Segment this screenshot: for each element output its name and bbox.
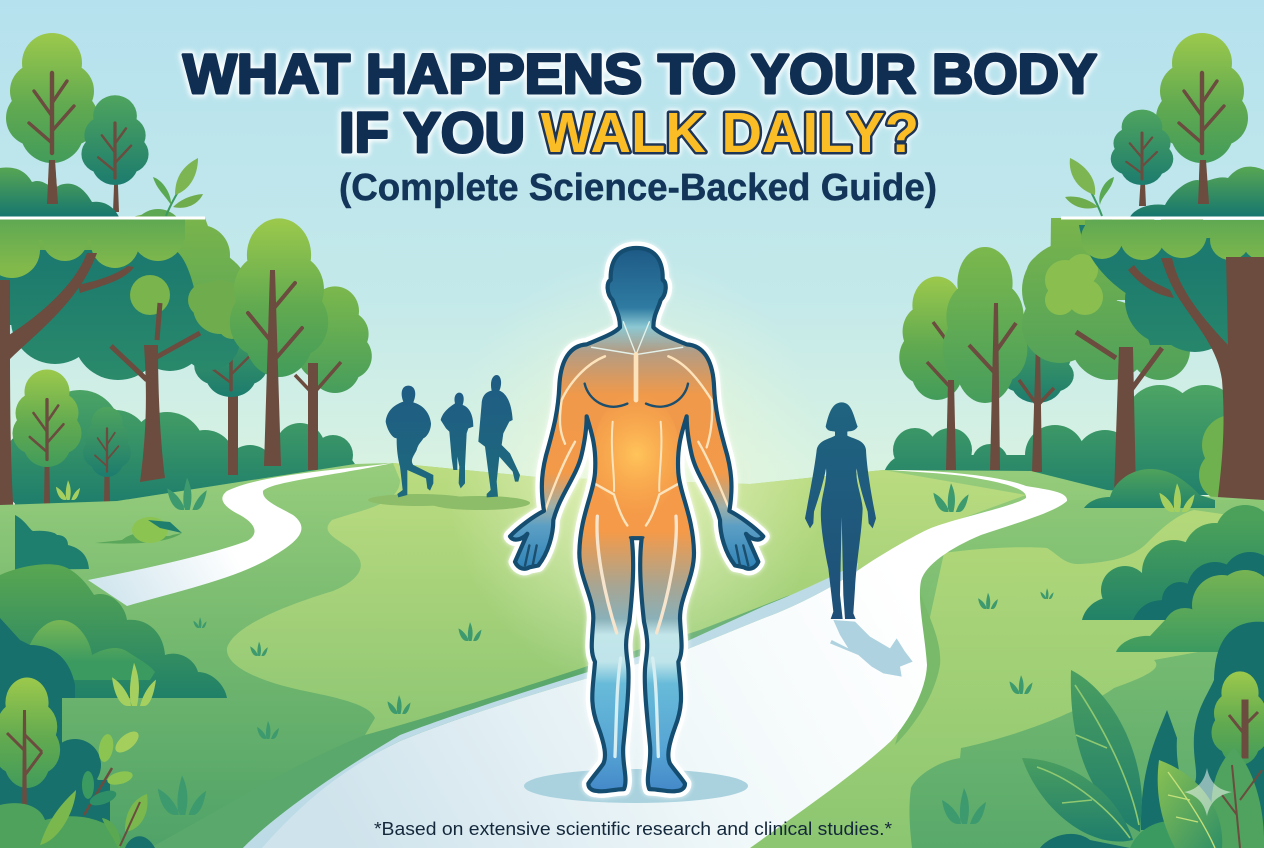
back-right bush bbox=[1084, 469, 1215, 508]
right light meadow bbox=[740, 510, 1264, 848]
sprout bbox=[153, 158, 203, 216]
central human body figure bbox=[490, 248, 783, 791]
title line 2: IF YOU WALK DAILY? bbox=[339, 101, 919, 165]
icon: sparkle watermark bbox=[1184, 768, 1232, 816]
tree: tall left center bbox=[230, 218, 328, 466]
left small bush bbox=[15, 515, 89, 570]
runners shadow bbox=[368, 494, 530, 510]
right foreground bushes bbox=[1082, 505, 1264, 652]
tree: far back trunk left bbox=[228, 360, 318, 475]
light tufts bbox=[56, 480, 1195, 512]
sprout right bbox=[1065, 158, 1114, 216]
bottom-left tree bbox=[0, 678, 60, 830]
footnote: *Based on extensive scientific research and clinical studies.* bbox=[374, 819, 892, 839]
left foreground bushes bbox=[0, 564, 227, 848]
runners group silhouette bbox=[386, 375, 520, 497]
right foreground dark column and tree bbox=[1165, 622, 1264, 848]
tree: small tree behind right trunk bbox=[1199, 415, 1262, 501]
tree: mid-left teal bbox=[194, 306, 268, 397]
tree: right canopy bbox=[1022, 208, 1264, 495]
ledge bush bbox=[0, 167, 119, 217]
tree: ledge tree small bbox=[81, 95, 149, 212]
dark strip beside main path bbox=[150, 595, 790, 848]
ground bbox=[0, 463, 1264, 848]
tree: ledge tree small right bbox=[1111, 110, 1173, 206]
tree: left large trunk bbox=[0, 253, 134, 585]
title glow bbox=[183, 42, 1097, 165]
figure ground shadow bbox=[524, 769, 748, 803]
tree: ledge tree large bbox=[6, 33, 98, 204]
title bbox=[183, 42, 1097, 209]
tree: left big canopy bbox=[0, 209, 247, 482]
muscle highlights bbox=[545, 322, 730, 756]
title glow: WHAT HAPPENS TO YOUR BODY bbox=[183, 42, 1097, 105]
top-right ledge of trees bbox=[1061, 33, 1264, 218]
title glow: IF YOU WALK DAILY? bbox=[339, 101, 919, 165]
grass tufts bbox=[95, 478, 1054, 824]
right meadow bbox=[740, 500, 1264, 848]
light tuft in bush bbox=[112, 663, 156, 706]
strip beside path right bbox=[895, 590, 940, 745]
walking woman shadow bbox=[830, 620, 913, 677]
ledge bush right bbox=[1130, 167, 1264, 217]
bottom-left plants bbox=[0, 728, 155, 848]
left winding path bbox=[88, 463, 393, 606]
tree: left small teal bbox=[83, 407, 131, 505]
bright halo behind figure bbox=[446, 250, 826, 690]
tree: ledge tree large right bbox=[1156, 33, 1248, 204]
tree: far-right of left group bbox=[295, 286, 372, 468]
distant bushes right bbox=[884, 385, 1264, 495]
main winding path bbox=[243, 470, 1067, 848]
tree: left small bbox=[12, 370, 82, 505]
light central mound bbox=[227, 463, 1026, 735]
tree: right trio bbox=[899, 247, 1074, 472]
right foreground leaves bbox=[1022, 670, 1264, 848]
core glow bbox=[597, 410, 676, 498]
chest and finger lines bbox=[525, 384, 748, 565]
tree: right large trunk bbox=[1128, 257, 1264, 535]
woman silhouette bbox=[805, 402, 876, 619]
subtitle: (Complete Science-Backed Guide) bbox=[339, 167, 937, 209]
title line 1: WHAT HAPPENS TO YOUR BODY bbox=[183, 42, 1097, 105]
top-left ledge of trees bbox=[0, 33, 205, 218]
distant bushes left bbox=[0, 390, 356, 515]
